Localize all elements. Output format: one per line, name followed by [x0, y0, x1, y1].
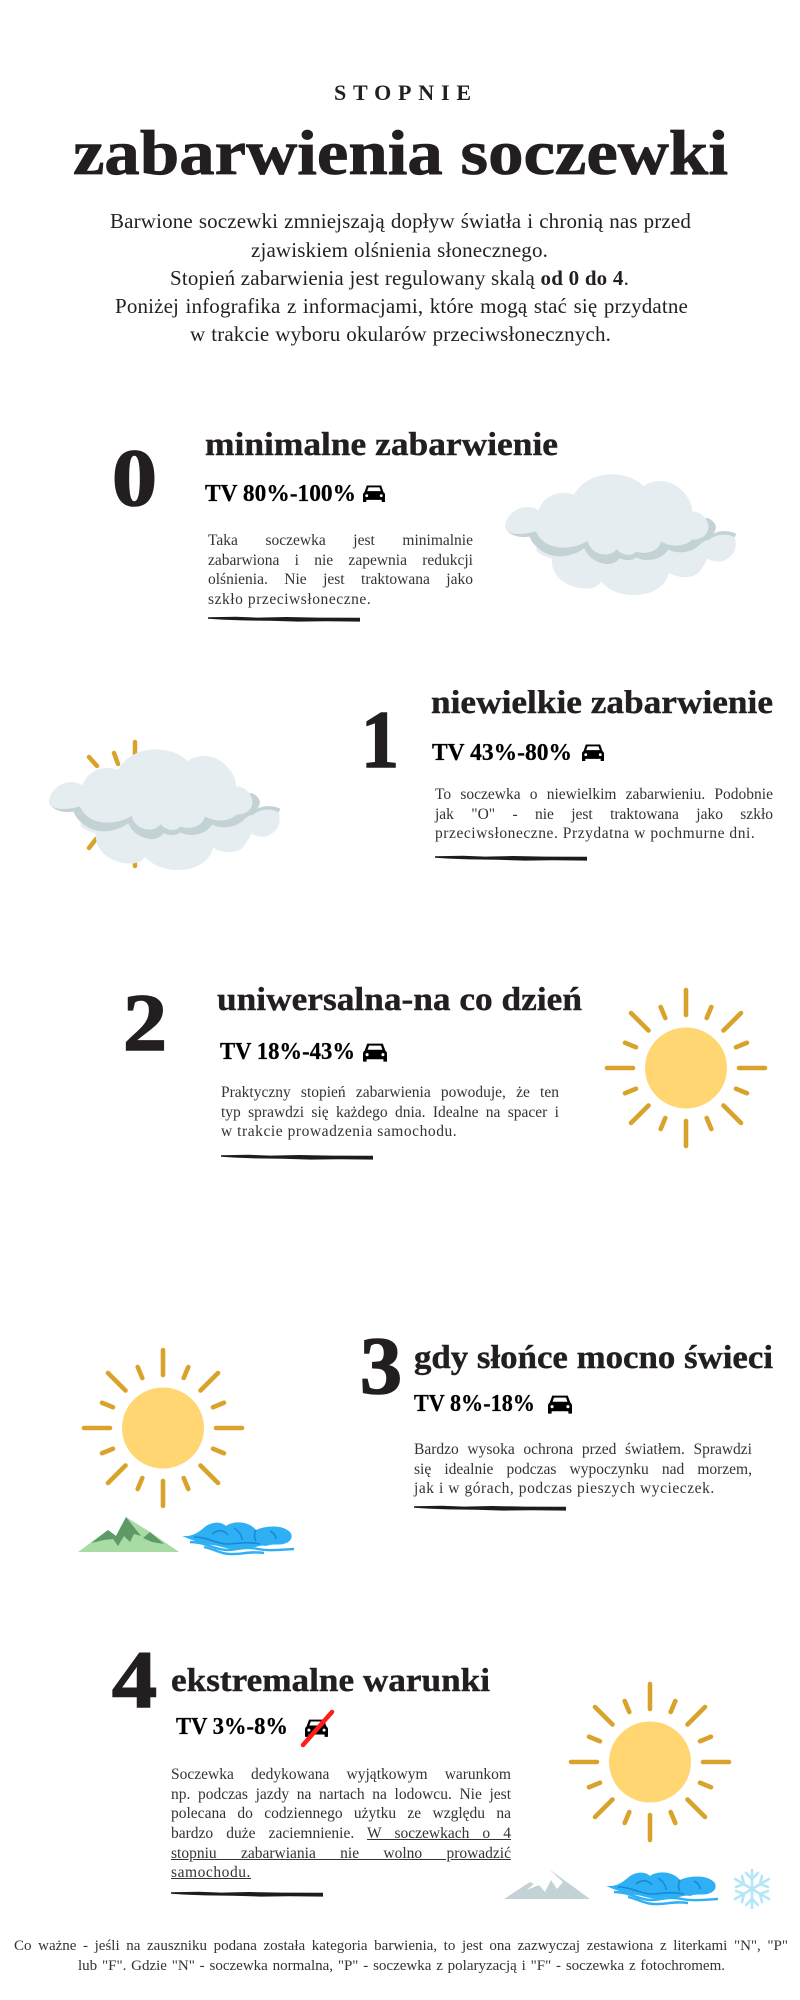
text block: introduction: zjawiskiem olśnienia słonecznego. — [251, 238, 548, 262]
text block: introduction — [110, 209, 691, 346]
number 0: 0 — [112, 432, 157, 523]
icon: snowy mountains — [504, 1869, 590, 1899]
divider brush stroke — [171, 1892, 323, 1897]
divider brush stroke — [221, 1155, 373, 1160]
icon: snowflake — [735, 1870, 769, 1908]
icon: sun — [607, 990, 765, 1146]
heading: stopnie: STOPNIE — [334, 80, 471, 105]
icon: car crossed out — [303, 1712, 332, 1745]
icon: car — [363, 486, 385, 502]
footnote — [14, 1938, 788, 1974]
icon: blue wave — [182, 1522, 294, 1554]
icon: car — [548, 1396, 572, 1414]
divider brush stroke — [435, 856, 587, 861]
text block: description: np. podczas jazdy na nartach na lodowcu. Nie jest — [171, 1786, 511, 1803]
divider brush stroke — [208, 617, 360, 622]
panel: stopień 4 — [112, 1645, 770, 1910]
text block: description: samochodu. — [171, 1864, 251, 1881]
text block: description: Taka soczewka jest minimalnie — [208, 532, 473, 549]
title: zabarwienia soczewki — [73, 117, 728, 188]
transmission value: TV 8%-18% — [414, 1391, 535, 1417]
text block: description — [171, 1766, 511, 1881]
panel: stopień 0 — [112, 427, 736, 622]
panel: stopień 3 — [78, 1330, 773, 1556]
text block: introduction: Poniżej infografika z informacjami, które mogą stać się przydatne — [115, 294, 688, 318]
text block: description: się idealnie podczas wypoczynku nad morzem, — [414, 1461, 752, 1478]
text block: description: w trakcie prowadzenia samochodu. — [221, 1123, 457, 1140]
icon: sun — [571, 1684, 729, 1840]
text block: description — [414, 1441, 752, 1497]
text block: introduction: Barwione soczewki zmniejszają dopływ światła i chronią nas przed — [110, 209, 691, 233]
footnote: lub "F". Gdzie "N" - soczewka normalna, "P" - soczewka z polaryzacją i "F" - soczewka z fotochromem. — [78, 1958, 725, 1974]
text block: description: jak i w górach, podczas pieszych wycieczek. — [414, 1480, 715, 1497]
text block: description — [221, 1084, 559, 1140]
text block: description — [208, 532, 473, 608]
panel: stopień 1 — [49, 690, 773, 870]
text block: description: stopniu zabarwiania nie wolno prowadzić — [171, 1845, 511, 1862]
text block: description: szkło przeciwsłoneczne. — [208, 591, 371, 608]
icon: sun — [84, 1350, 242, 1506]
icon: cloud — [49, 749, 280, 870]
heading: minimalne zabarwienie — [205, 427, 558, 463]
header: title and introduction — [73, 80, 728, 346]
text block: introduction: Stopień zabarwienia jest regulowany skalą od 0 do 4. — [170, 266, 629, 290]
footnote: Co ważne - jeśli na zauszniku podana została kategoria barwienia, to jest ona zazwyczaj zestawiona z literkami "N", "P" — [14, 1938, 788, 1954]
text block: description: Praktyczny stopień zabarwienia powoduje, że ten — [221, 1084, 559, 1101]
divider brush stroke — [414, 1506, 566, 1511]
icon: green mountains — [78, 1517, 179, 1552]
text block: description: jak "O" - nie jest traktowana jako szkło — [435, 806, 773, 823]
text block: description: polecana do codziennego użytku ze względu na — [171, 1805, 511, 1822]
icon: cloud — [505, 474, 736, 595]
transmission value: TV 18%-43% — [220, 1039, 355, 1065]
panel: stopień 2 — [123, 985, 768, 1160]
text block: description: zabarwiona i nie zapewnia redukcji — [208, 552, 473, 569]
text block: description: typ sprawdzi się każdego dnia. Idealne na spacer i — [221, 1104, 559, 1121]
transmission value: TV 43%-80% — [432, 740, 572, 766]
icon: car — [363, 1044, 387, 1062]
icon: sun rays behind cloud — [89, 742, 135, 866]
text block: introduction: w trakcie wyboru okularów przeciwsłonecznych. — [190, 322, 611, 346]
text block: description — [434, 786, 773, 842]
text block: description: To soczewka o niewielkim zabarwieniu. Podobnie — [435, 786, 773, 803]
transmission value: TV 3%-8% — [176, 1714, 288, 1740]
text block: description: Soczewka dedykowana wyjątkowym warunkom — [171, 1766, 511, 1783]
icon: car — [582, 745, 604, 761]
heading: gdy słońce mocno świeci — [414, 1340, 773, 1376]
text block: description: przeciwsłoneczne. Przydatna w pochmurne dni. — [435, 825, 755, 842]
text block: description: olśnienia. Nie jest traktowana jako — [208, 571, 473, 588]
heading: ekstremalne warunki — [171, 1663, 490, 1699]
number 1: 1 — [361, 694, 399, 785]
text block: description: Bardzo wysoka ochrona przed światłem. Sprawdzi — [414, 1441, 752, 1458]
text block: description: bardzo duże zaciemnienie. W soczewkach o 4 — [171, 1825, 511, 1842]
transmission value: TV 80%-100% — [205, 481, 356, 507]
icon: blue wave — [606, 1872, 718, 1904]
